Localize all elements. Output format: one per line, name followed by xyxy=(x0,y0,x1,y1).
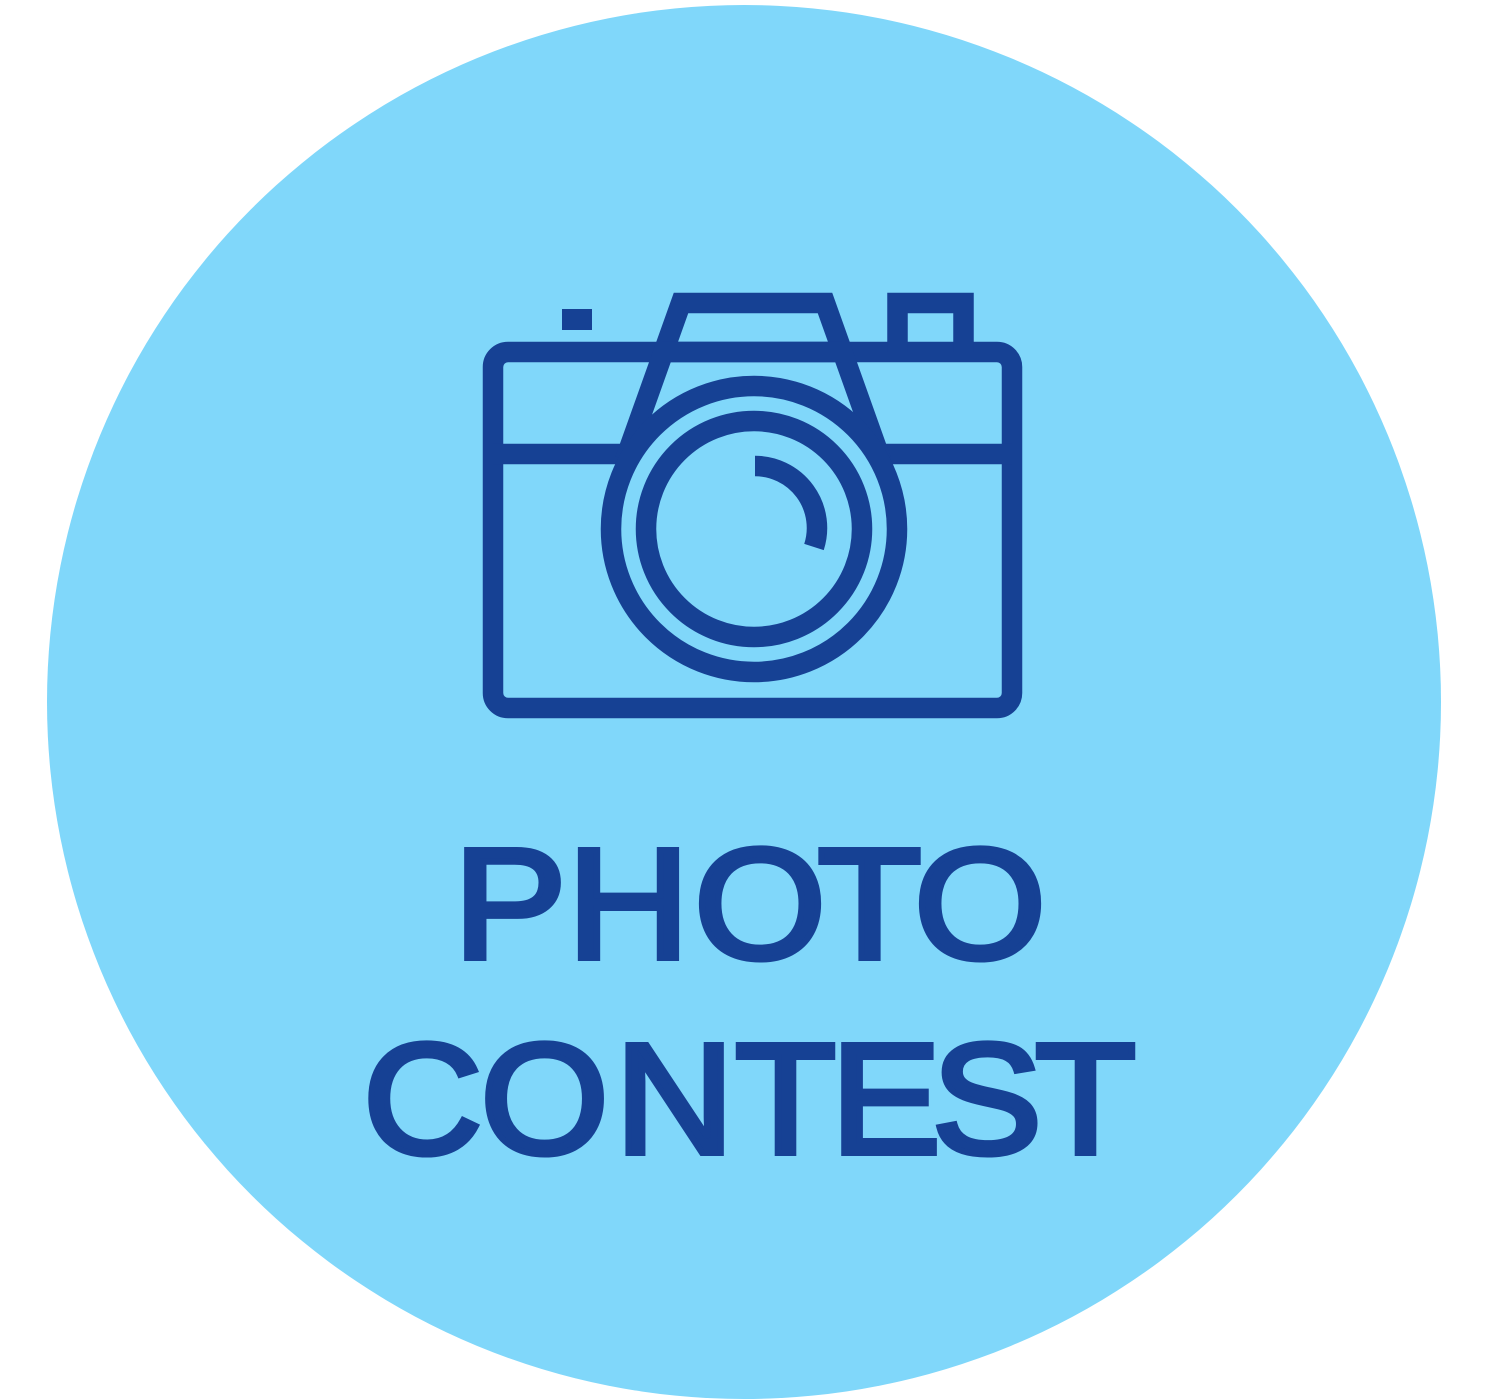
icon: camera xyxy=(493,303,1012,708)
title line: PHOTO: PHOTO xyxy=(453,816,1046,992)
title xyxy=(363,816,1136,1187)
title line: CONTEST: CONTEST xyxy=(363,1012,1136,1187)
